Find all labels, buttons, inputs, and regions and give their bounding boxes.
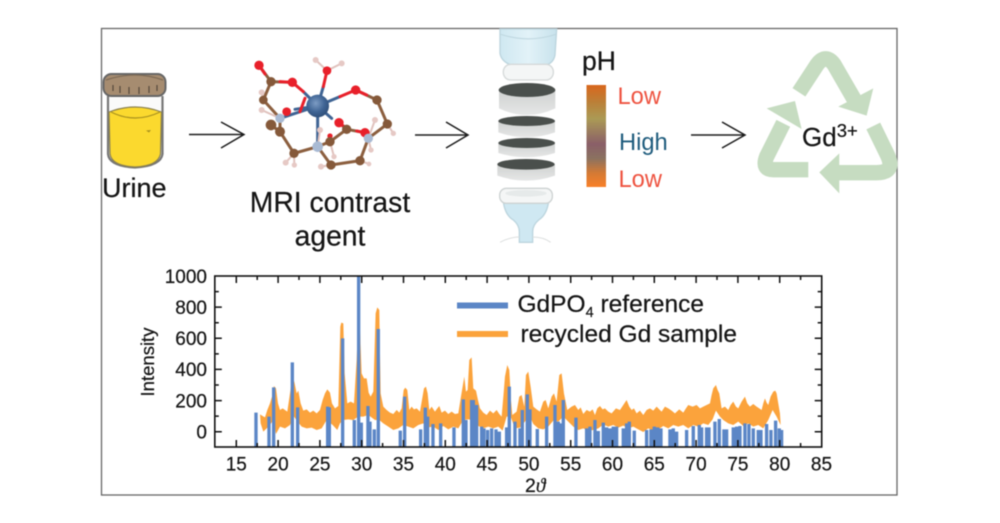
x axis tick labels: 60 [602,454,623,476]
x axis tick labels: 80 [769,454,790,476]
icon: urine jar [104,74,166,168]
icon: chromatography column [497,29,557,242]
y axis tick labels: 800 [175,298,207,319]
outer frame [102,28,897,495]
molecule: MRI contrast agent [254,57,396,170]
recycled Gd sample trace [260,303,781,434]
x axis tick labels: 15 [226,454,247,476]
y axis tick labels: 400 [175,360,207,381]
x axis tick labels: 20 [268,454,289,476]
pH gradient bar [586,85,606,187]
x axis tick labels: 50 [518,454,539,476]
x axis tick labels: 30 [351,454,372,476]
label: pH: pH [582,46,616,76]
x axis tick labels: 55 [560,454,581,476]
GdPO4 reference bars [256,276,782,447]
arrow: column to recycled Gd [691,122,745,148]
y axis title: Intensity [137,327,158,396]
x axis tick labels: 35 [393,454,414,476]
y axis tick labels [165,267,207,444]
x axis tick labels: 45 [477,454,498,476]
x axis tick labels: 40 [435,454,456,476]
x axis tick labels: 70 [686,454,707,476]
label: High: High [619,130,668,156]
label: Gd3+: Gd [802,122,837,152]
y axis tick labels: 200 [175,392,207,412]
legend: recycled Gd sample [520,321,737,348]
y axis tick labels: 600 [175,329,207,350]
label: Low bottom: Low [618,167,663,193]
legend: reference [594,291,704,318]
y axis tick labels: 1000 [165,267,207,288]
x axis tick labels: 85 [811,454,832,476]
legend: 4 [586,305,594,321]
arrow: urine to contrast agent [189,122,244,148]
label: MRI contrast agent: agent [295,220,366,252]
plot frame and ticks [215,276,822,447]
legend [457,291,737,348]
x axis title: 2ϑ [525,475,547,497]
label: Gd3+: 3+ [837,120,858,141]
label: Low top: Low [618,84,662,110]
y axis tick labels: 0 [196,422,207,444]
x axis tick labels [226,454,832,476]
x axis tick labels: 65 [644,454,665,476]
legend: GdPO [518,291,586,318]
x axis tick labels: 25 [309,454,330,476]
chart: XRD pattern [137,267,832,497]
label: Urine: Urine [102,173,167,203]
x axis tick labels: 75 [727,454,748,476]
icon: recycling triangle [765,59,890,193]
label: MRI contrast agent: MRI contrast [250,186,410,218]
arrow: contrast agent to column [415,122,468,148]
